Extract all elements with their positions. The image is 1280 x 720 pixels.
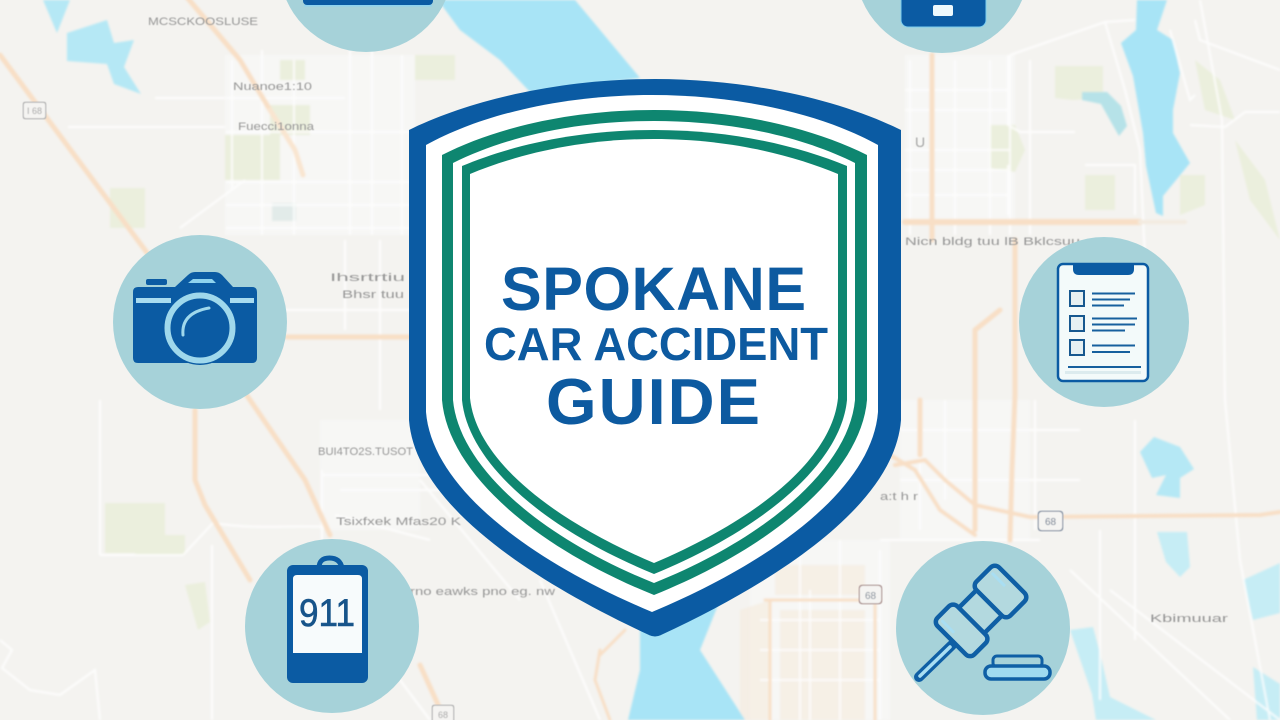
icon circle: checklist [1019, 237, 1189, 407]
icon: clipboard with 911: 911 [299, 592, 355, 635]
map label: Tsixfxek Mfas20 K [336, 516, 462, 528]
highway marker [23, 102, 46, 119]
shield inner green stripe [462, 130, 847, 574]
shield white band [426, 95, 878, 612]
highway marker: 68 [865, 591, 876, 602]
map label: Nuanoe1:10 [233, 81, 312, 93]
map label: a:t h r [880, 491, 918, 503]
icon circle: gavel [896, 541, 1070, 715]
map label: MCSCKOOSLUSE [148, 16, 258, 28]
map label: Ihsrtrtiu [330, 272, 405, 284]
title [484, 255, 828, 438]
shield outer blue border [409, 79, 901, 636]
icon circle: top right, cropped [855, 0, 1029, 53]
icon: gavel [919, 562, 1050, 679]
map label: rno eawks pno eg. nw [410, 586, 555, 598]
icon circle: 911 clipboard [245, 539, 419, 713]
shield white gap [453, 121, 855, 583]
title line: GUIDE: GUIDE [546, 365, 760, 438]
highway marker: 68 [1045, 517, 1056, 528]
icon: camera body [133, 272, 257, 365]
shield white center [470, 139, 838, 563]
icon: clipboard checklist [1058, 263, 1148, 381]
map label: BUI4TO2S.TUSOT [318, 446, 413, 458]
highway marker [859, 585, 882, 604]
icon: clipboard with 911 [287, 558, 368, 683]
map label: Kbimuuar [1150, 613, 1229, 625]
highway marker: I 68 [27, 106, 42, 116]
highway marker: 68 [438, 710, 448, 720]
map label: Bhsr tuu [342, 289, 404, 301]
shield badge [409, 79, 901, 636]
map label: Fuecci1onna [238, 121, 315, 133]
highway marker [1038, 511, 1063, 531]
title line: CAR ACCIDENT: CAR ACCIDENT [484, 318, 828, 370]
highway marker: U [915, 134, 925, 150]
icon circle: camera [113, 235, 287, 409]
shield outer green stripe [442, 110, 867, 595]
map label: Nicn bldg tuu lB Bklcsuu [905, 236, 1080, 248]
icon circle: top left, cropped [279, 0, 453, 52]
highway marker [432, 705, 454, 720]
title line: SPOKANE: SPOKANE [501, 255, 806, 323]
